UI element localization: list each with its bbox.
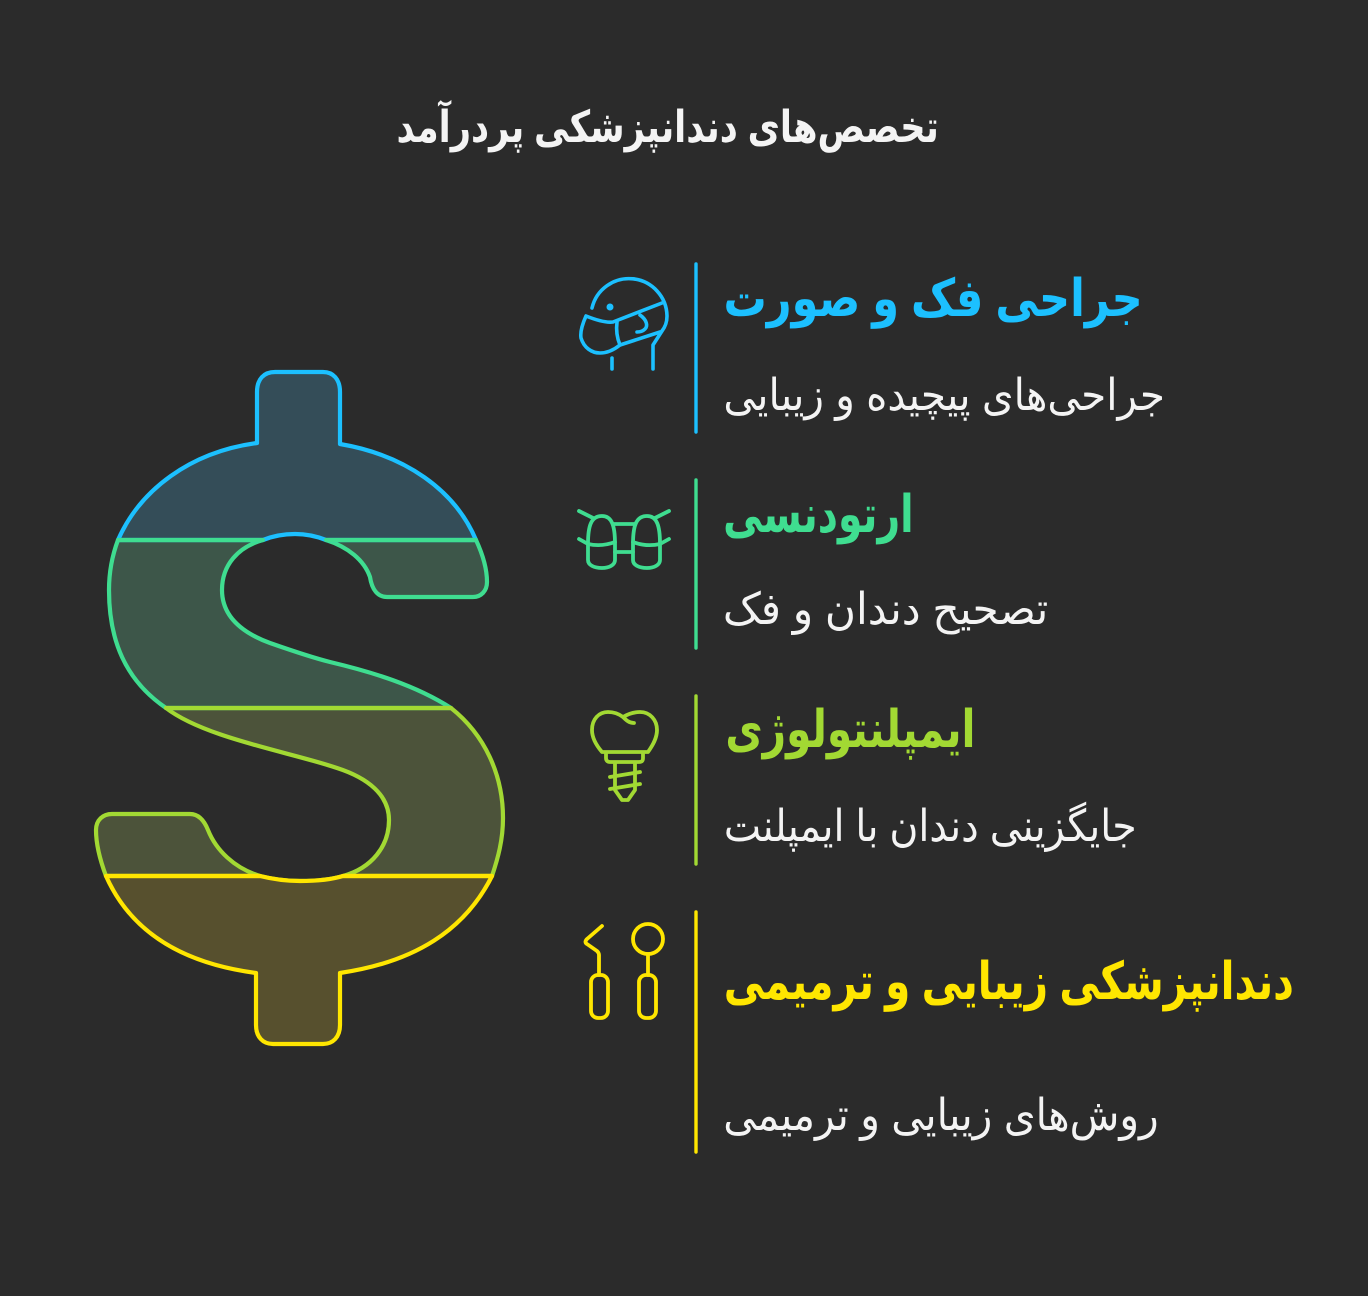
dollar segment: lime [96, 708, 503, 881]
text: cosmetic and restorative methods: روش‌های زیبایی و ترمیمی [724, 1091, 1159, 1140]
divider: yellow [694, 912, 698, 1152]
dollar segment: yellow [106, 876, 492, 1044]
text: complex and cosmetic surgeries: جراحی‌های پیچیده و زیبایی [723, 371, 1165, 420]
icon: braces on teeth [579, 511, 669, 568]
heading: cosmetic and restorative dentistry: دندانپزشکی زیبایی و ترمیمی [724, 953, 1294, 1011]
heading: implantology: ایمپلنتولوژی [725, 701, 975, 759]
dollar segment: green [109, 540, 487, 708]
heading: orthodontics: ارتودنسی [724, 486, 914, 544]
text: teeth and jaw correction: تصحیح دندان و فک [723, 585, 1048, 634]
dollar separator: lime line [166, 706, 451, 710]
dollar segment: blue [118, 372, 476, 540]
title: تخصص‌های دندانپزشکی پردرآمد [397, 103, 939, 152]
icon: dental tools [586, 924, 663, 1018]
dollar sign chart [96, 372, 503, 1044]
divider: lime [694, 696, 698, 864]
heading: jaw and face surgery: جراحی فک و صورت [724, 270, 1143, 328]
icon: dental implant [592, 712, 657, 800]
divider: green [694, 480, 698, 648]
text: tooth replacement with implant: جایگزینی دندان با ایمپلنت [724, 802, 1137, 851]
divider: blue [694, 264, 698, 432]
dollar separator: yellow line [106, 874, 492, 878]
dollar separator: green line [118, 538, 476, 542]
icon: surgeon with mask [581, 279, 667, 369]
